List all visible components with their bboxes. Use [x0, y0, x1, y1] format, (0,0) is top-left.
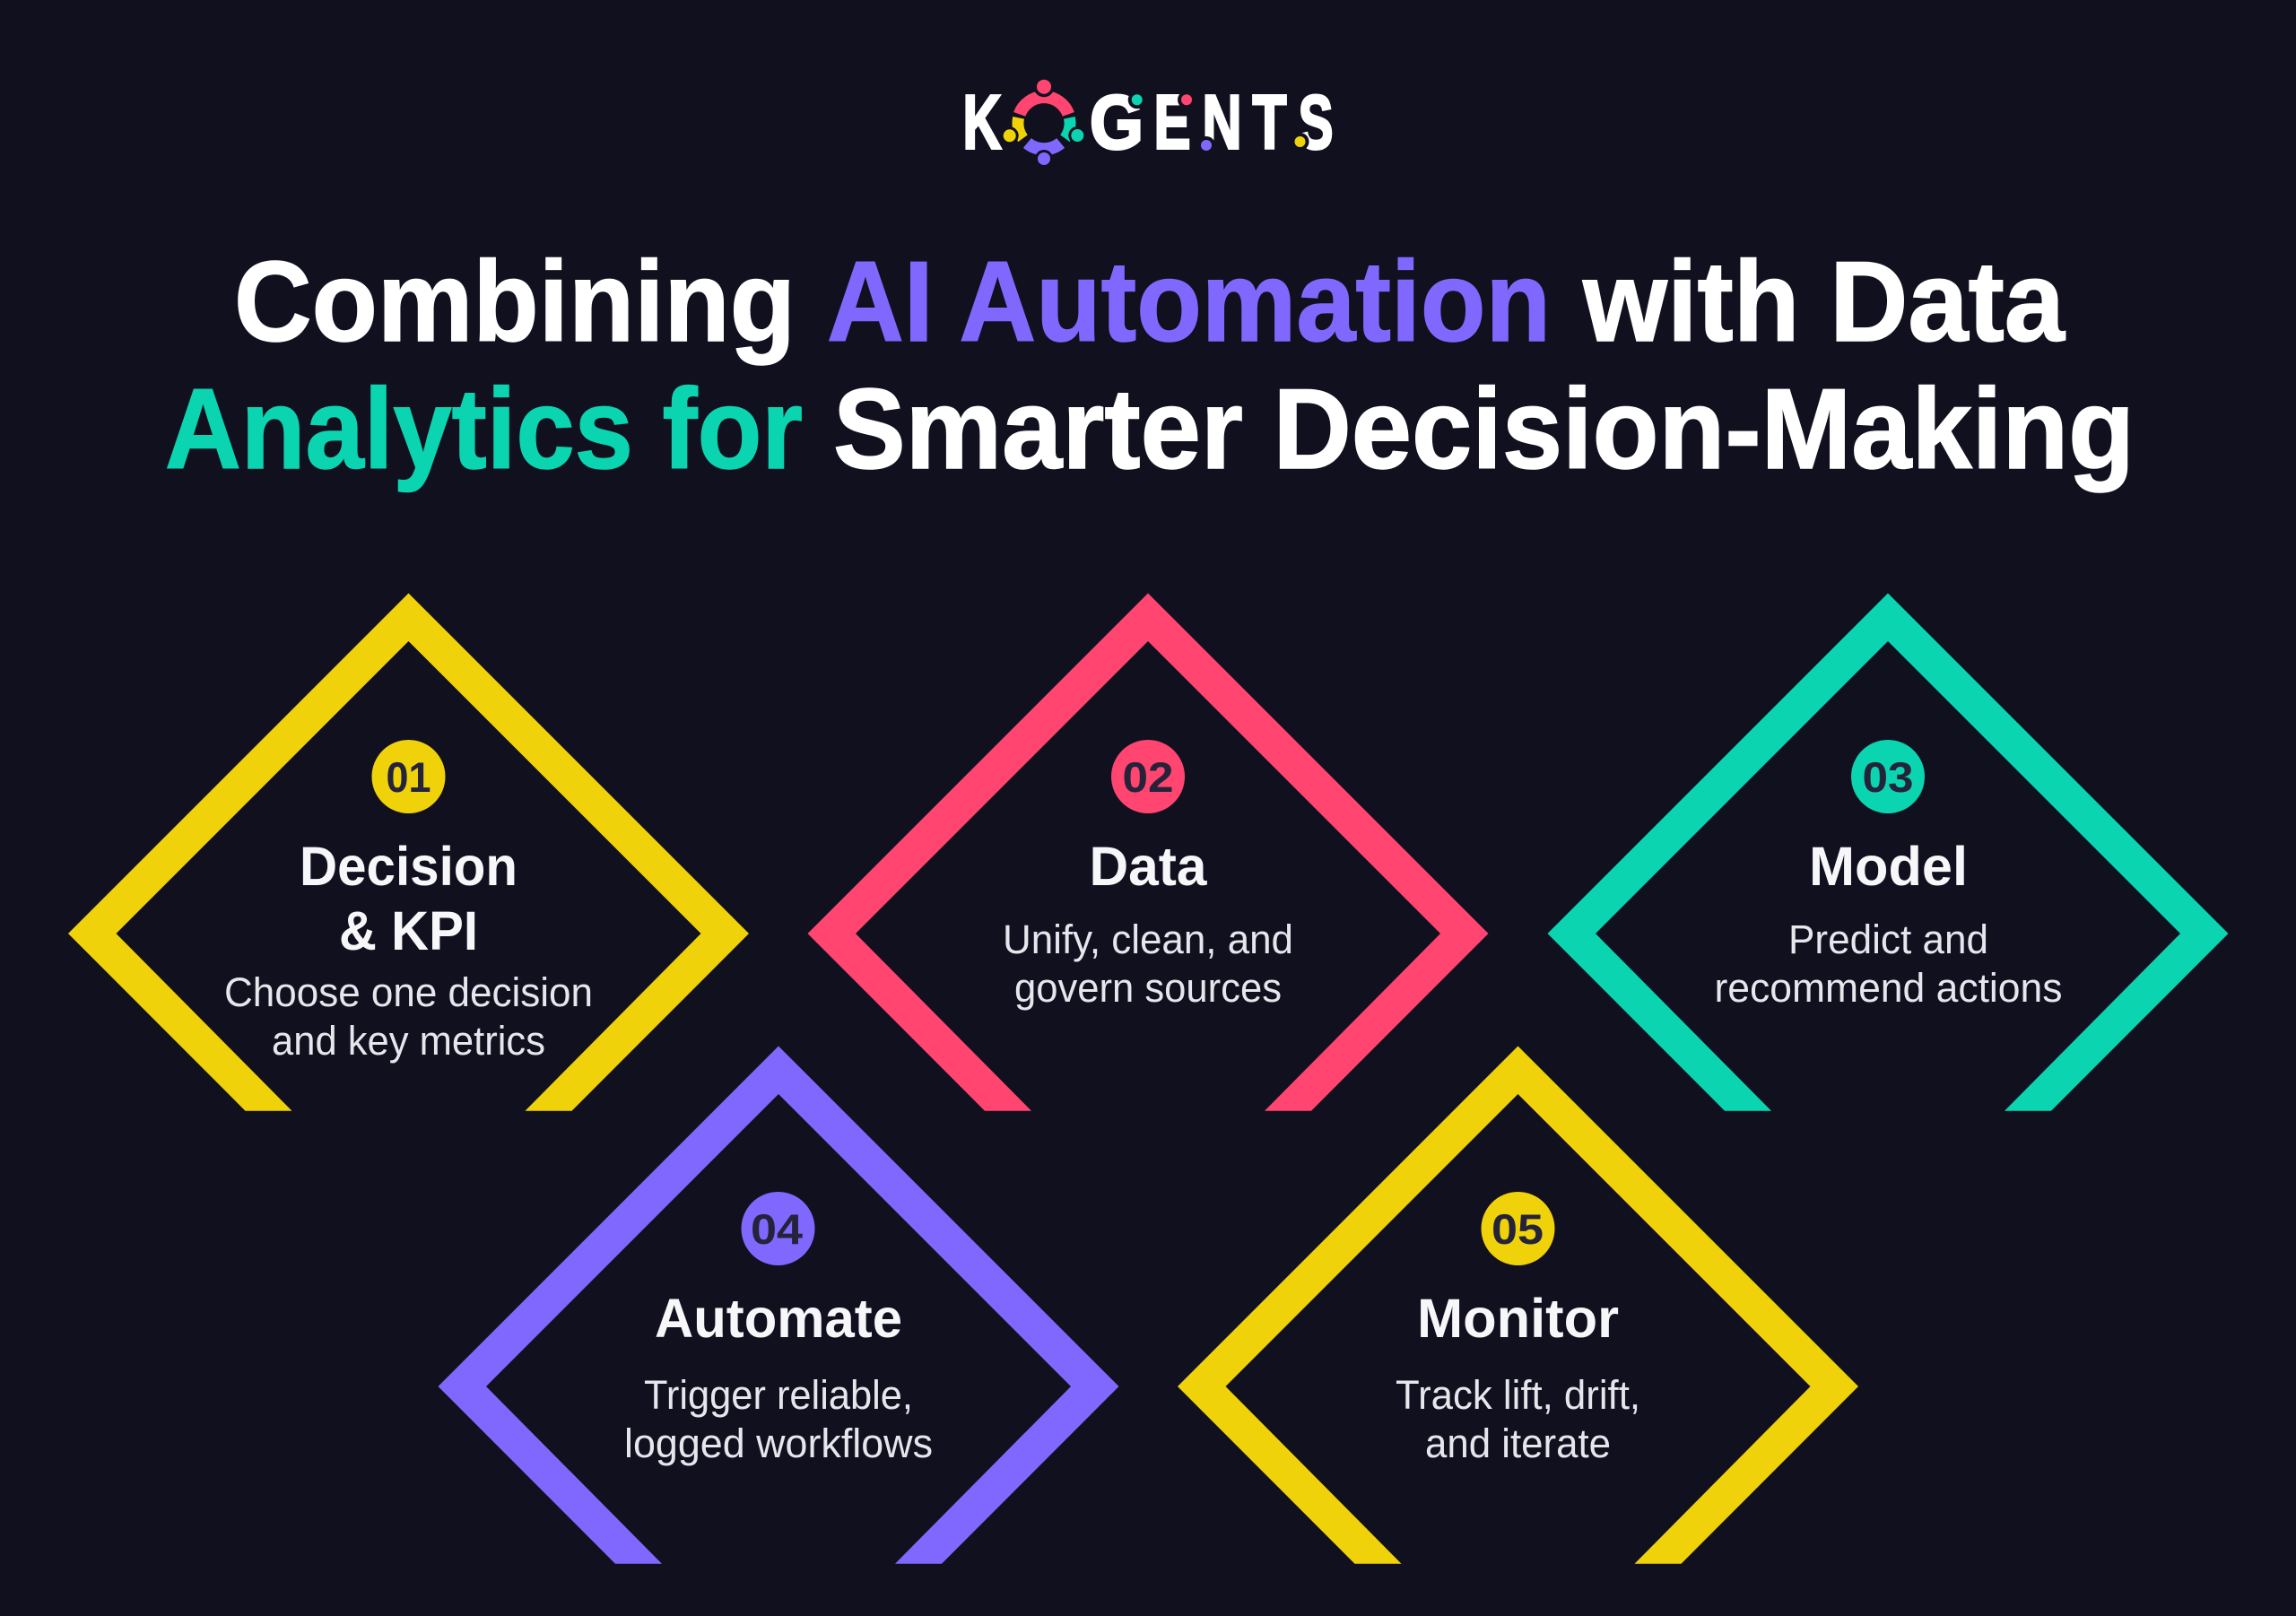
heading: Decision & KPI: & KPI: [339, 900, 478, 961]
description: [1715, 917, 2063, 1011]
title: [165, 238, 2135, 492]
number badge 01: 01: [386, 753, 430, 801]
diamond frame: yellow: [1178, 1046, 1858, 1564]
number badge 04: 04: [751, 1205, 803, 1253]
heading: Model: Model: [1809, 836, 1968, 897]
logo: Kogents: [963, 76, 1333, 168]
title: with Data: [1582, 238, 2066, 365]
title: Analytics for: [165, 365, 803, 492]
heading: Decision & KPI: Decision: [300, 836, 517, 897]
description: govern sources: [1014, 965, 1282, 1011]
description: [1003, 917, 1293, 1011]
logo wordmark: K: [963, 81, 1001, 165]
number badge 04: [741, 1192, 814, 1265]
number badge 02: 02: [1123, 753, 1173, 801]
logo wordmark: N: [1202, 81, 1241, 165]
description: Trigger reliable,: [644, 1372, 913, 1418]
description: and iterate: [1425, 1421, 1611, 1466]
description: Unify, clean, and: [1003, 917, 1293, 962]
logo wordmark: G: [1090, 81, 1144, 165]
panel: 05 Monitor: [1178, 1046, 1858, 1564]
diamond frame: purple: [438, 1046, 1119, 1564]
panel: 03 Model: [1548, 594, 2228, 1111]
diamond frame: yellow: [68, 594, 749, 1111]
description: Predict and: [1788, 917, 1988, 962]
diamond frame: teal: [1548, 594, 2228, 1111]
number badge 03: [1851, 740, 1925, 813]
heading: Data: Data: [1089, 836, 1208, 897]
panel: 02 Data: [807, 594, 1489, 1111]
description: logged workflows: [624, 1421, 933, 1466]
title: Combining: [234, 238, 796, 365]
description: [624, 1372, 933, 1466]
logo wordmark: T: [1252, 81, 1287, 165]
logo wordmark: [963, 81, 1333, 165]
diamond frame: pink: [807, 594, 1489, 1111]
number badge 05: 05: [1492, 1205, 1544, 1253]
description: Track lift, drift,: [1396, 1372, 1640, 1418]
title: AI Automation: [827, 238, 1551, 365]
heading: Monitor: Monitor: [1417, 1288, 1619, 1349]
number badge 02: [1111, 740, 1185, 813]
heading: Decision & KPI: [300, 836, 517, 961]
description: recommend actions: [1715, 965, 2063, 1011]
panel: 01 Decision & KPI: [68, 594, 749, 1111]
logo accent dots: [1128, 91, 1309, 154]
logo wordmark: E: [1153, 81, 1191, 165]
logo wordmark: S: [1299, 81, 1333, 165]
description: [224, 969, 593, 1064]
number badge 01: [371, 740, 445, 813]
description: and key metrics: [272, 1018, 545, 1064]
description: Choose one decision: [224, 969, 593, 1015]
title: Smarter Decision-Making: [833, 365, 2135, 492]
description: [1396, 1372, 1640, 1466]
number badge 05: [1482, 1192, 1555, 1265]
number badge 03: 03: [1862, 753, 1914, 801]
panel: 04 Automate: [438, 1046, 1119, 1564]
heading: Automate: Automate: [655, 1288, 902, 1349]
logo icon: ring of people: [1001, 76, 1086, 168]
